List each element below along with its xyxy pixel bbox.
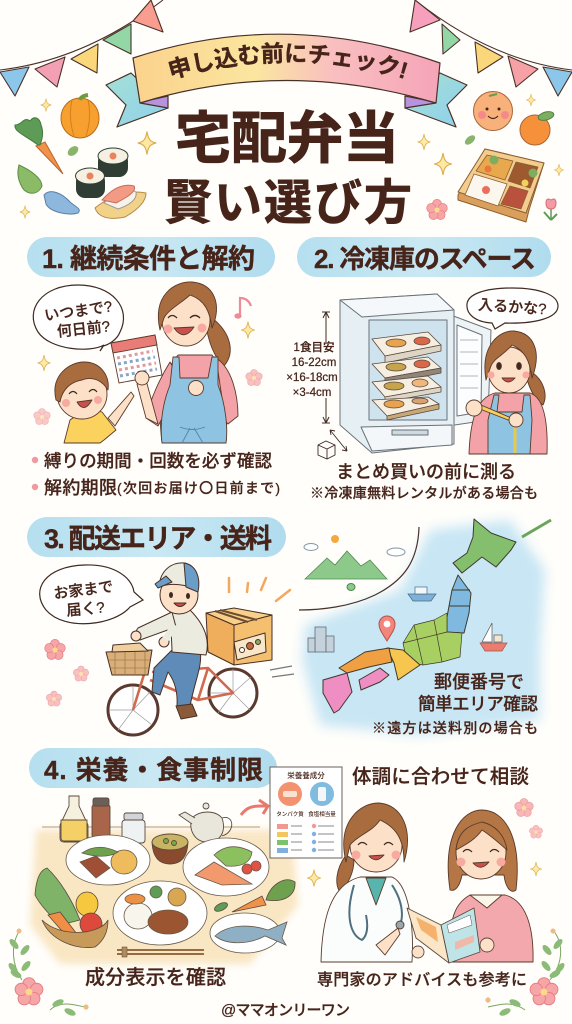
heading pill 2: 2. 冷凍庫のスペース — [314, 244, 536, 274]
icon: blue fish cake — [44, 192, 79, 214]
dimension text: 16-22cm — [292, 357, 336, 369]
region: Kyushu — [323, 673, 352, 713]
decoration: speed lines and flowers — [45, 578, 294, 706]
illustration: mother — [137, 282, 238, 443]
speech bubble: delivered home — [40, 565, 143, 624]
caption: postal code check: 簡単エリア確認 — [418, 694, 538, 714]
bunting: right — [410, 0, 572, 96]
credit: @ママオンリーワン — [221, 1002, 350, 1019]
regions — [323, 519, 551, 713]
frozen meal trays — [372, 332, 441, 420]
nutrition label card: 栄養養成分 — [287, 770, 325, 780]
delivery box — [206, 608, 272, 665]
decoration: note, sparkles, flowers — [34, 298, 262, 425]
caption: measure before buying: まとめ買いの前に測る — [336, 462, 516, 482]
ribbon text: 申し込む前にチェック! — [168, 42, 408, 78]
rider torso — [170, 605, 207, 655]
sparkles right — [418, 94, 564, 176]
food icons right — [418, 92, 564, 222]
heading pill 4 — [29, 748, 277, 788]
caption: postal code check: ※遠方は送料別の場合も — [372, 720, 538, 736]
speech bubble: delivered home: 届く? — [66, 599, 105, 620]
icon: smiling orange — [474, 92, 512, 130]
bullet list: 縛りの期間・回数を必ず確認 — [44, 451, 272, 471]
region: Chugoku — [339, 648, 392, 673]
icon: sailboat — [480, 623, 507, 651]
icon: carrot — [15, 118, 63, 174]
banner ribbon — [105, 34, 468, 128]
heading pill 3 — [27, 517, 286, 557]
speech bubble: will it fit — [467, 288, 558, 329]
corner floral left — [7, 928, 89, 1017]
corner floral right — [485, 928, 566, 1017]
illustration: delivery rider — [106, 563, 272, 735]
teapot — [179, 803, 232, 842]
icon: location pin — [379, 616, 395, 641]
sea wash — [302, 520, 545, 735]
speech bubble: will it fit: 入るかな? — [478, 297, 547, 318]
carrot and greens — [213, 880, 295, 913]
heading: consult for your condition: 体調に合わせて相談 — [352, 766, 529, 788]
title: 宅配弁当 — [175, 107, 399, 170]
region: Kanto and Chubu — [403, 613, 462, 665]
speech bubble: delivered home: お家まで — [53, 578, 114, 603]
captions: 専門家のアドバイスも参考に — [317, 971, 527, 989]
nutrition label card: 食塩相当量 — [308, 810, 336, 818]
nutrition label card: タンパク質 — [276, 810, 304, 818]
dimension text: 1食目安 — [294, 340, 334, 354]
rider legs — [152, 650, 201, 706]
nutrition label card — [270, 767, 342, 858]
captions — [85, 966, 527, 989]
illustration: child — [55, 362, 134, 443]
region: Shikoku — [359, 668, 389, 690]
dimension text: ×16-18cm — [286, 372, 338, 384]
panel: 3 delivery area — [7, 517, 566, 1019]
heading pill 2 — [297, 237, 551, 277]
plate: fish — [210, 913, 287, 953]
arrow to nutrition label — [241, 800, 268, 815]
dimension text — [286, 340, 338, 399]
speech bubble: when: いつまで? — [43, 298, 113, 325]
rider head and cap — [160, 576, 198, 614]
vegetable basket — [35, 868, 108, 948]
illustration: freezer — [340, 294, 491, 453]
illustration: consulting woman — [448, 810, 533, 962]
map of Japan — [299, 519, 551, 736]
icon: buildings — [308, 627, 334, 652]
bunting: left — [0, 0, 163, 96]
speech bubble: when — [33, 285, 124, 351]
region: Kuril islands — [522, 520, 551, 537]
title: 賢い選び方 — [164, 177, 412, 230]
food icons left — [15, 95, 156, 218]
caption: measure before buying: ※冷凍庫無料レンタルがある場合も — [310, 485, 538, 501]
inset landscape — [304, 535, 405, 590]
bullet list: 解約期限 — [44, 478, 117, 498]
icon: orange — [520, 110, 555, 145]
panel: 4 nutrition — [7, 748, 566, 1019]
decoration: sparkles and flowers — [307, 798, 543, 886]
region: Hokkaido — [453, 519, 516, 573]
icon: bell pepper — [61, 95, 99, 138]
heading pill 4: 4. 栄養・食事制限 — [44, 755, 263, 785]
open booklet — [407, 908, 494, 963]
icon: nigiri sushi — [95, 185, 146, 218]
condiments — [60, 796, 145, 843]
heading pill 1 — [27, 237, 275, 277]
bullet list — [32, 451, 280, 498]
icon: ship — [408, 587, 436, 601]
icon: flower — [427, 199, 447, 220]
captions: 成分表示を確認 — [85, 966, 226, 989]
bicycle — [108, 655, 257, 735]
plate: hamburg and rice — [113, 881, 207, 945]
chopsticks — [117, 947, 204, 957]
rider arm — [133, 612, 176, 640]
front basket — [106, 643, 152, 675]
caption: postal code check: 郵便番号で — [434, 672, 524, 692]
icon: green vegetable — [18, 165, 42, 193]
title — [164, 107, 412, 230]
caption: postal code check — [372, 672, 538, 736]
panel: 2 freezer space — [286, 237, 558, 501]
region: Kinki — [387, 648, 420, 680]
panel: 1 contract terms — [27, 237, 280, 498]
caption: measure before buying — [310, 462, 538, 501]
ribbon tails — [106, 73, 467, 127]
dimension text: ×3-4cm — [293, 387, 331, 399]
icon: maki rolls — [76, 148, 128, 198]
illustration: woman with tape — [466, 331, 547, 454]
icon: tulip — [544, 199, 557, 220]
region: Tohoku — [447, 575, 471, 633]
bullet list: (次回お届け〇日前まで) — [117, 480, 280, 496]
plate: salmon — [183, 838, 269, 896]
sparkles left — [20, 98, 156, 218]
illustration: doctor — [321, 803, 412, 962]
icon: cube and depth arrow — [318, 430, 347, 459]
soup bowl — [152, 834, 188, 864]
speech bubble: when: 何日前? — [56, 318, 111, 341]
dining table — [30, 827, 298, 964]
icon: bento box — [458, 149, 544, 222]
inset divider — [299, 527, 419, 610]
heading pill 3: 3. 配送エリア・送料 — [44, 524, 272, 554]
plate: meat and croquette — [66, 835, 150, 885]
dimension arrow — [322, 312, 330, 423]
heading pill 1: 1. 継続条件と解約 — [42, 244, 255, 274]
icon: calendar — [111, 335, 162, 385]
